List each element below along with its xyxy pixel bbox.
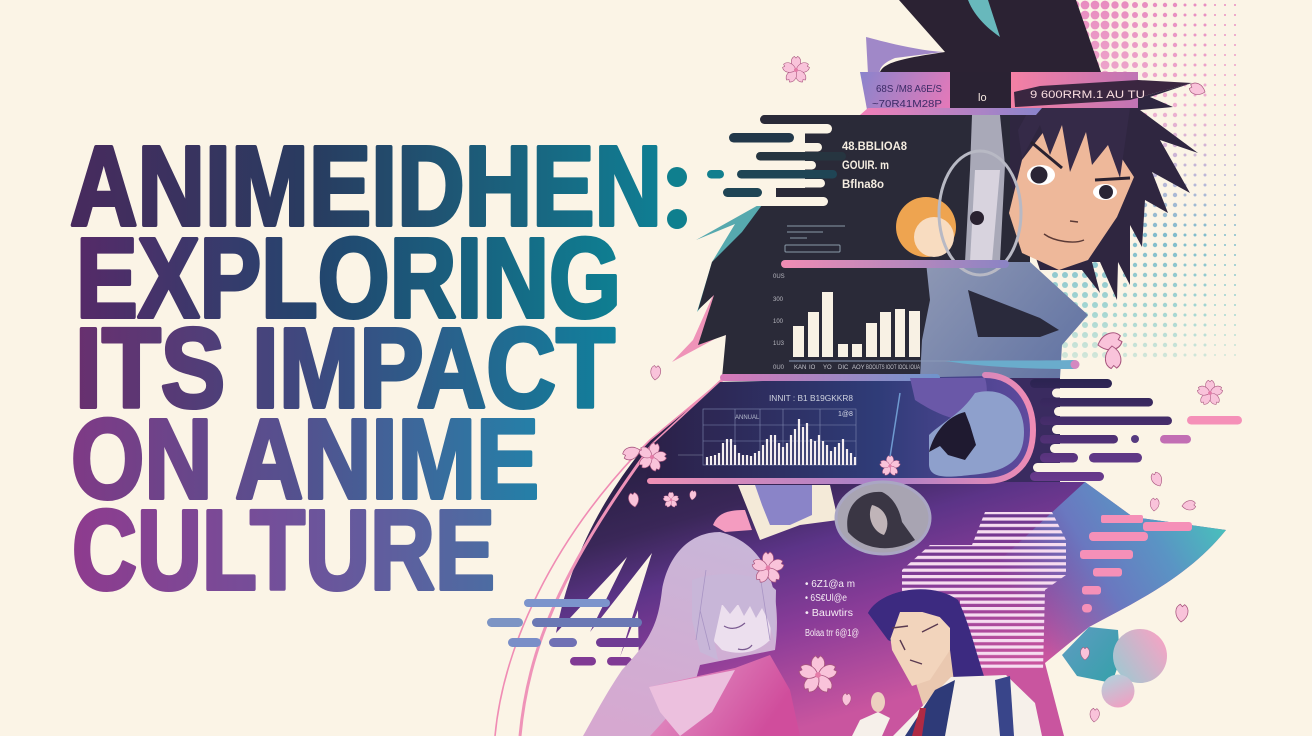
lilac top bar [720, 374, 940, 381]
y axis labels: 1U3 [773, 341, 785, 347]
pink streak pills right [1080, 515, 1192, 612]
kimono [649, 655, 800, 736]
striped cloud [902, 512, 1066, 670]
purple blob [910, 378, 987, 420]
jacket [893, 675, 1042, 736]
x axis labels: AOY [852, 365, 865, 371]
blue needle line [890, 393, 900, 457]
dark backing for streak ends [776, 115, 835, 210]
dark upper panel [698, 115, 1030, 378]
face [888, 607, 950, 686]
face [704, 605, 772, 653]
y axis labels: 0U0 [773, 365, 785, 371]
teal sliver [968, 0, 1000, 37]
bullet list: Bolaa trr 6@1@ [805, 628, 859, 639]
label text: 68S /M8 A6E/S [876, 84, 942, 95]
neck [915, 650, 955, 712]
photo window [929, 391, 1024, 477]
y axis labels: 0US [773, 274, 785, 280]
top hair spike [866, 0, 1101, 74]
headphone ring and strap [939, 115, 1021, 275]
boy eyes and mouth [1027, 142, 1130, 242]
axis line [789, 360, 950, 362]
pink divider bar [781, 260, 1009, 268]
panel text: Bflna8o [842, 177, 884, 191]
bubbles [1102, 629, 1167, 708]
chart value: 1@8 [838, 411, 853, 418]
eye and mouth [724, 623, 752, 650]
title [70, 123, 686, 613]
chart sublabel: ANNUAL [735, 415, 760, 421]
right-hand streak pills [1030, 379, 1242, 481]
bullet list: • Bauwtirs [805, 608, 853, 619]
colon dot [667, 167, 687, 187]
y axis labels: 100 [773, 319, 784, 325]
front hair [868, 590, 955, 640]
bangs [692, 574, 776, 660]
text: : [668, 123, 686, 249]
panel text: GOUIR. m [842, 158, 889, 172]
halftone dots [1052, 0, 1236, 358]
jacket [920, 262, 1088, 378]
lilac label [860, 72, 962, 115]
chart heading: INNIT : B1 B19GKKR8 [769, 394, 854, 403]
title line 1: ANIMEIDHEN [70, 123, 662, 249]
y axis labels [773, 274, 785, 371]
y axis labels: 300 [773, 297, 784, 303]
circular inset [836, 482, 930, 554]
dark label [950, 72, 1012, 108]
tail to teal tip [1000, 482, 1226, 736]
shirt and tie [905, 680, 955, 736]
photo inset cream [713, 485, 838, 540]
bullet list [805, 579, 859, 639]
title line 2: EXPLORING [76, 215, 621, 341]
right-hand streak background [1000, 378, 1060, 482]
pink label [1011, 72, 1138, 108]
bar chart [773, 274, 1080, 371]
chart grid [678, 409, 856, 465]
area chart bars [707, 419, 855, 465]
dark jacket panel [968, 290, 1059, 337]
x axis labels: IO [809, 365, 816, 371]
dark hair in photo [929, 412, 976, 460]
lilac fold [866, 37, 943, 74]
thin label lines [785, 226, 845, 252]
pink arcs [495, 380, 722, 736]
title line 4: ON ANIME [71, 396, 539, 522]
boy face [1009, 117, 1134, 270]
teal blob [1062, 627, 1120, 683]
x axis labels [794, 365, 920, 371]
collar [649, 670, 735, 736]
title line 3: ITS IMPACT [75, 305, 615, 431]
cherry blossoms [621, 56, 1224, 722]
label text: ~70R41M28P [872, 99, 942, 110]
bars [793, 292, 920, 357]
boy bangs [1018, 108, 1130, 178]
long hair back [868, 589, 986, 690]
x axis labels: KAN [794, 365, 806, 371]
boy back hair [1010, 83, 1198, 300]
x axis labels: BOOUTS IOOT IOOL IOUA [866, 365, 920, 371]
panel text [842, 139, 907, 191]
man in white jacket [868, 589, 1042, 736]
label text: lo [978, 92, 987, 104]
pink outline [650, 375, 1033, 481]
panel text: 48.BBLIOA8 [842, 139, 907, 153]
streak pills lower left [487, 599, 642, 666]
face details [892, 624, 938, 664]
lower purple shape [556, 378, 1226, 736]
underline [860, 108, 1042, 115]
bullet list: • 6S€Ul@e [805, 593, 847, 604]
x axis labels: YO [823, 365, 832, 371]
girl with lavender hair [583, 532, 800, 736]
orange headphone disc [896, 197, 956, 257]
streak pills upper left [667, 115, 850, 229]
middle rounded panel [645, 374, 1033, 483]
blue bar [945, 360, 1078, 369]
teal and pink hair spikes behind panel [672, 203, 780, 376]
bang strands [696, 570, 770, 650]
bullet list: • 6Z1@a m [805, 579, 855, 590]
hair [583, 532, 777, 736]
colon dot [667, 209, 687, 229]
panel body [645, 376, 1033, 483]
tiny figure [852, 692, 890, 736]
top label strip [860, 72, 1192, 115]
title line 5: CULTURE [72, 487, 495, 613]
x axis labels: DIC [838, 365, 849, 371]
label text: 9 600RRM.1 AU TU [1030, 89, 1145, 101]
